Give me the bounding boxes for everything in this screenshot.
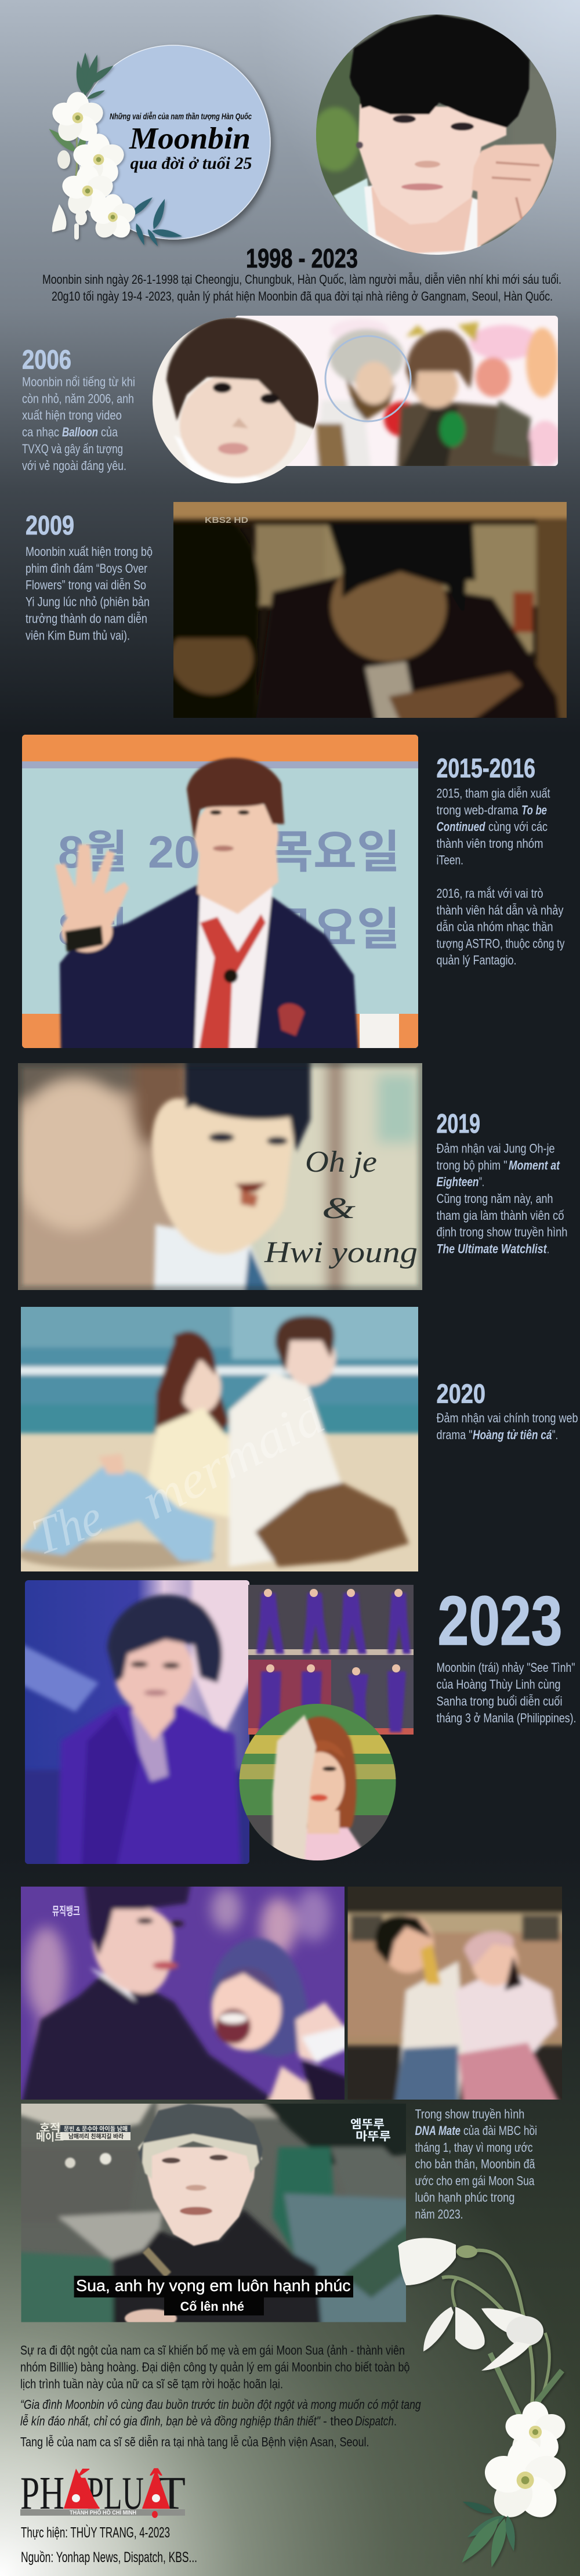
photo caption (264, 1146, 418, 1269)
show graphic: corner title (350, 2118, 391, 2143)
photo: Balloon music video (235, 316, 563, 470)
text block: intro (42, 272, 561, 304)
text block: closing paragraph: nhóm Billlie) bàng hoàng. Đại diện công ty quản lý em gái Moonbin cho biết toàn bộ (20, 2360, 409, 2375)
text block: 2020 (436, 1411, 578, 1442)
show graphic: program logo and caption (36, 2122, 130, 2143)
text block: 2006: xuất hiện trong video (22, 408, 122, 422)
heading: 2009: 2009 (26, 510, 74, 540)
text block: DNA Mate: của đài MBC hồi (463, 2123, 537, 2138)
text block: 2006: của (101, 425, 118, 439)
text block: closing paragraph: Tang lễ của nam ca sĩ sẽ diễn ra tại nhà tang lễ của Bệnh viện Asan, Seoul. (20, 2435, 369, 2449)
text block: 2006 (22, 374, 135, 473)
text block: 2015-2016: trong web-drama (436, 803, 519, 817)
text block: 2019 (436, 1141, 567, 1256)
logo: Pháp Luật: THÀNH PHỐ HỒ CHÍ MINH (70, 2508, 136, 2516)
text block: 2015-2016: iTeen. (436, 853, 463, 868)
text block: DNA Mate: cho bản thân, Moonbin đã (415, 2157, 535, 2172)
text block: 2006: Moonbin nổi tiếng từ khi (22, 374, 135, 389)
text block: DNA Mate: năm 2023. (415, 2207, 463, 2221)
backdrop lettering: 20 (148, 826, 200, 877)
heading: 2020: 2020 (436, 1379, 485, 1409)
text block: DNA Mate: Trong show truyền hình (415, 2107, 524, 2122)
text block: 2015-2016: 2016, ra mắt với vai trò (436, 886, 543, 901)
backdrop lettering: 목요일 (270, 826, 400, 877)
text block: 2019: ". (479, 1175, 484, 1189)
photo caption: Oh je (305, 1146, 377, 1179)
text block: 2006: còn nhỏ, năm 2006, anh (22, 391, 134, 406)
photo: Hoàng Thùy Linh (239, 1704, 396, 1863)
backdrop lettering: 목요일 (270, 904, 400, 955)
snowdrop 2 (423, 2307, 485, 2351)
credit: sources: Nguồn: Yonhap News, Dispatch, KBS... (21, 2549, 197, 2566)
text block: 2020: ". (552, 1428, 558, 1442)
text block: 2015-2016: 2015, tham gia diễn xuất (436, 786, 550, 801)
logo: Pháp Luật: PLU (87, 2468, 144, 2519)
photo: Moonbin with Moon Sua on stage (21, 1880, 348, 2107)
text block: DNA Mate: ước cho em gái Moon Sua (415, 2173, 535, 2188)
logo: Pháp Luật: Ậ (142, 2468, 170, 2519)
text block: DNA Mate: DNA Mate (415, 2123, 461, 2138)
text block: closing paragraph: “Gia đình Moonbin vô cùng đau buồn trước tin buồn đột ngột và mong muốn có một tang (20, 2397, 421, 2412)
title disc (77, 45, 270, 239)
heading: lifespan: 1998 - 2023 (246, 243, 358, 273)
logo: Pháp Luật: Á (64, 2468, 100, 2519)
photo: Boys Over Flowers still (173, 502, 567, 718)
text block: closing paragraph: . (394, 2414, 397, 2428)
text block: 2009 (26, 544, 153, 643)
photo caption: Hwi young (264, 1236, 418, 1269)
subtitle line 1: Sua, anh hy vọng em luôn hạnh phúc (76, 2277, 351, 2295)
photo: Oh je and Hwi young (18, 1063, 422, 1290)
snowdrop 3 (481, 2308, 543, 2371)
text block: 2019: . (547, 1241, 549, 1256)
poster script title: The (25, 1488, 110, 1566)
heading: 2006: 2006 (22, 345, 71, 375)
text block: closing paragraph: lịch trình tuần này của nữ ca sĩ sẽ tạm rời hoặc hoãn lại. (20, 2376, 283, 2391)
text block: 2015-2016: To be (521, 803, 547, 817)
photo: child portrait (153, 317, 320, 484)
icon: snowdrop and anemone bouquet (398, 2238, 571, 2568)
backdrop lettering: 8월 (58, 904, 128, 955)
subtitle line 2 (164, 2297, 264, 2315)
subtitle: qua đời ở tuổi 25 (130, 154, 252, 173)
logo: Pháp Luật: T (158, 2468, 186, 2519)
text block: DNA Mate: luôn hạnh phúc trong (415, 2190, 515, 2205)
title kicker: Những vai diễn của nam thần tượng Hàn Quốc (110, 111, 252, 122)
subtitle line 2: Cố lên nhé (180, 2299, 244, 2314)
text block: DNA Mate (415, 2107, 537, 2221)
backdrop lettering (58, 826, 400, 955)
text block: 2020: Hoàng tử tiên cá (473, 1428, 552, 1442)
text block: closing paragraph: Sự ra đi đột ngột của nam ca sĩ khiến bố mẹ và em gái Moon Sua (ảnh - thành viên (20, 2343, 405, 2358)
text block: 2019: The Ultimate Watchlist (436, 1241, 548, 1256)
text block: 2006: TVXQ và gây ấn tượng (22, 442, 123, 456)
text block: 2015-2016 (436, 786, 565, 967)
show graphic: corner title: 엠뚜루 (350, 2118, 385, 2131)
logo: Pháp Luật: PH (20, 2468, 64, 2519)
backdrop lettering: 8월 (58, 826, 128, 877)
show logo: 뮤직뱅크 (52, 1905, 80, 1918)
photo: The Mermaid Prince poster (21, 1307, 418, 1571)
show graphic: program logo and caption: 남매끼리 친해지길 바라 (68, 2133, 124, 2140)
poster script title: mermaid (132, 1387, 334, 1531)
text block: 2019: Đảm nhận vai Jung Oh-je (436, 1141, 554, 1156)
show graphic: program logo and caption: 호적 (39, 2122, 60, 2134)
text block: 2019: Moment at (509, 1158, 560, 1172)
panel: title circle (77, 45, 270, 239)
text block: 2006: Balloon (62, 425, 98, 439)
photo: childhood siblings (348, 1887, 562, 2100)
text block: closing paragraph: lễ kín đáo nhất, chỉ có gia đình, bạn bè và đồng nghiệp thân thiết" (20, 2414, 321, 2428)
text block: 2023 (436, 1660, 577, 1725)
text block: closing paragraph (20, 2343, 421, 2449)
show graphic: corner title: 마뚜루 (356, 2130, 391, 2143)
text block: 2020: drama " (436, 1428, 472, 1442)
text block: DNA Mate: tháng 1, thay vì mong ước (415, 2140, 532, 2155)
title: Moonbin: Moonbin (129, 122, 251, 156)
heading: 2019: 2019 (436, 1108, 480, 1139)
credit: author: Thực hiện: THÙY TRANG, 4-2023 (21, 2524, 170, 2541)
text block: 2019: trong bộ phim " (436, 1158, 507, 1172)
text block: 2019: Cũng trong năm này, anh (436, 1191, 553, 1206)
icon: flower wreath on title circle (46, 53, 183, 247)
show graphic: program logo and caption: 문빈 & 문수아 아이돌 남매 (64, 2125, 128, 2133)
snowdrop 1 (398, 2238, 477, 2285)
text block: 2009: Moonbin xuất hiện trong bộ (26, 544, 153, 559)
text block: 2009: viên Kim Bum thủ vai). (26, 628, 130, 643)
text block: 2015-2016: thành viên trong nhóm (436, 836, 543, 851)
highlight ring around child (325, 336, 411, 421)
text block: 2009: phim đình đám “Boys Over (26, 561, 147, 576)
broadcaster logo: KBS2 HD (205, 515, 248, 525)
text block: 2006: với vẻ ngoài đáng yêu. (22, 458, 126, 473)
text block: 2015-2016: cùng với các (488, 819, 548, 834)
photo grid: stage dance frames (248, 1585, 414, 1735)
anemone flowers (480, 2401, 571, 2525)
text block: closing paragraph: - theo (323, 2414, 353, 2428)
heading: 2015-2016: 2015-2016 (436, 753, 535, 783)
text block: 2015-2016: dẫn của nhóm nhạc thần (436, 920, 553, 934)
text block: 2019: Eighteen (436, 1175, 479, 1189)
text block: 2006: ca nhạc (22, 425, 59, 439)
photo caption: & (322, 1192, 356, 1225)
photo: Moonbin portrait (311, 12, 563, 261)
text block: 2009: trưởng thành do nam diễn (26, 612, 147, 626)
photo: Moonbin on stage (25, 1580, 249, 1864)
text block: 2009: Yi Jung lúc nhỏ (phiên bản (26, 595, 150, 609)
poster script title (33, 1396, 325, 1554)
text block: 2015-2016: Continued (436, 819, 485, 834)
text block: closing paragraph: Dispatch (355, 2414, 394, 2428)
leaves (457, 2498, 518, 2568)
show graphic: program logo and caption: 메이트 (36, 2131, 64, 2143)
text block: 2009: Flowers” trong vai diễn So (26, 578, 146, 592)
text block: 2015-2016: quản lý Fantagio. (436, 953, 516, 967)
photo: DNA Mate selfie (21, 2104, 406, 2322)
photo: press event (22, 735, 418, 1053)
logo: Pháp Luật (20, 2468, 186, 2519)
